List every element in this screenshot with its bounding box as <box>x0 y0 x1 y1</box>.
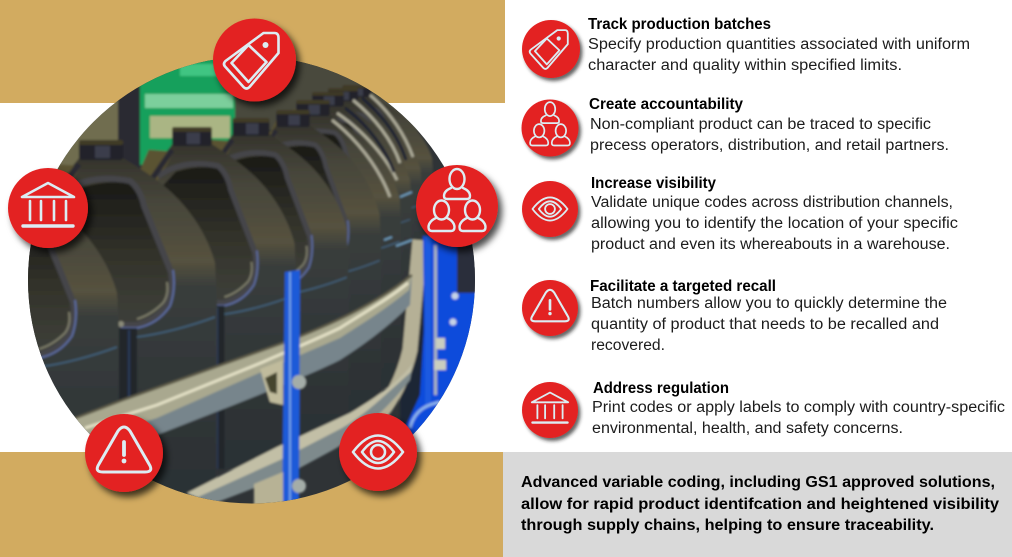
text: facilitate a targeted recall: quantity of product that needs to be recalled and <box>591 316 939 333</box>
text: address regulation: environmental, health, and safety concerns. <box>592 420 903 437</box>
text: increase visibility: Validate unique codes across distribution channels, <box>591 194 953 211</box>
icon: tag badge <box>213 18 296 102</box>
rail: lower <box>187 363 413 505</box>
text: address regulation <box>592 380 1005 437</box>
text: increase visibility: Increase visibility <box>591 175 716 192</box>
far right machinery backdrop <box>400 190 490 510</box>
text: increase visibility: allowing you to identify the location of your specific <box>591 215 958 232</box>
icon: eye badge <box>339 413 417 491</box>
text: facilitate a targeted recall: Facilitate a targeted recall <box>590 278 776 295</box>
panel: summary callout <box>503 452 1012 557</box>
panel: summary callout: through supply chains, helping to ensure traceability. <box>521 517 934 534</box>
text: create accountability: Create accountability <box>589 96 743 113</box>
gold band: bottom <box>0 452 503 557</box>
icon: warning badge <box>85 414 163 492</box>
rail: upper <box>88 278 412 436</box>
text: address regulation: Address regulation <box>593 380 729 397</box>
item: track production batches <box>522 16 970 78</box>
icon: eye <box>522 181 578 237</box>
text: facilitate a targeted recall: recovered. <box>591 337 665 354</box>
text: increase visibility <box>591 175 958 253</box>
photo: bottles on conveyor in a circle <box>28 60 475 504</box>
text: create accountability: Non-compliant product can be traced to specific <box>590 116 931 133</box>
icon: tag <box>522 20 580 78</box>
gold band: top <box>0 0 505 103</box>
text: increase visibility: product and even its whereabouts in a warehouse. <box>591 236 950 253</box>
text: address regulation: Print codes or apply labels to comply with country-specific <box>592 399 1005 416</box>
icon: people <box>522 100 578 156</box>
rail back silver <box>378 238 426 415</box>
icon: people hierarchy badge <box>416 165 498 247</box>
bottles far to near <box>342 85 433 238</box>
icon: building <box>522 382 578 438</box>
blue post <box>282 270 300 510</box>
text: facilitate a targeted recall: Batch numbers allow you to quickly determine the <box>591 295 947 312</box>
text: track production batches: character and quality within specified limits. <box>588 57 902 74</box>
text: facilitate a targeted recall <box>590 278 947 354</box>
clamps <box>260 360 283 405</box>
item: create accountability <box>522 96 949 156</box>
item: facilitate a targeted recall <box>522 278 947 354</box>
panel: summary callout: Advanced variable coding, including GS1 approved solutions, <box>521 474 995 491</box>
icon: warning <box>522 280 578 336</box>
text: create accountability: precess operators, distribution, and retail partners. <box>590 137 949 154</box>
icon: government building badge <box>8 168 88 248</box>
text: track production batches: Specify production quantities associated with uniform <box>588 36 970 53</box>
text: track production batches <box>588 16 970 74</box>
blue machinery <box>405 234 475 434</box>
text: track production batches: Track production batches <box>588 16 771 33</box>
far bottle shoulder highlights <box>332 95 413 197</box>
text: create accountability <box>589 96 949 154</box>
item: increase visibility <box>522 175 958 253</box>
panel: summary callout: allow for rapid product identifcation and heightened visibility <box>521 496 999 513</box>
item: address regulation <box>522 380 1005 438</box>
